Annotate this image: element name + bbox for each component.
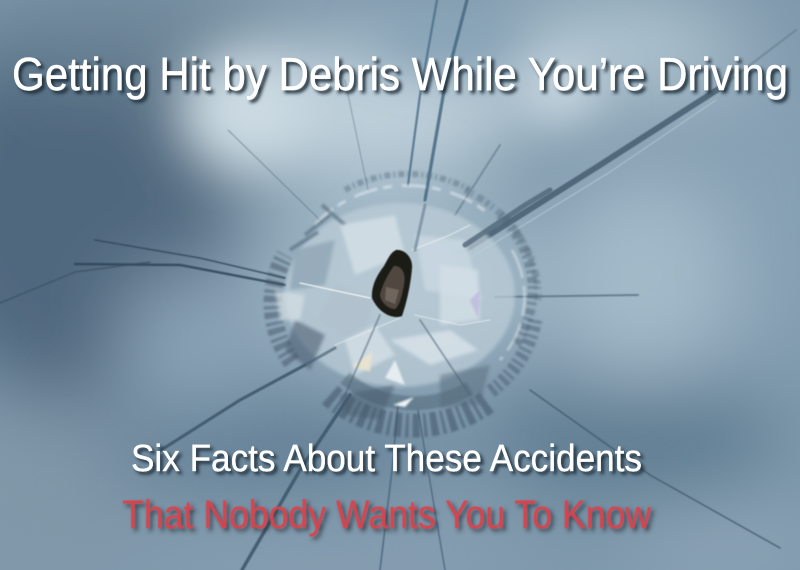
glints (352, 290, 480, 407)
shattered glass impact (273, 174, 550, 426)
inner glass shards (275, 215, 490, 420)
concentric fracture rings (273, 174, 538, 426)
soft glass base (285, 203, 515, 387)
bullet hole (372, 250, 412, 317)
red tagline: That Nobody Wants You To Know (122, 493, 651, 537)
subtitle: Six Facts About These Accidents (131, 438, 642, 480)
inner crack lines (300, 190, 550, 395)
